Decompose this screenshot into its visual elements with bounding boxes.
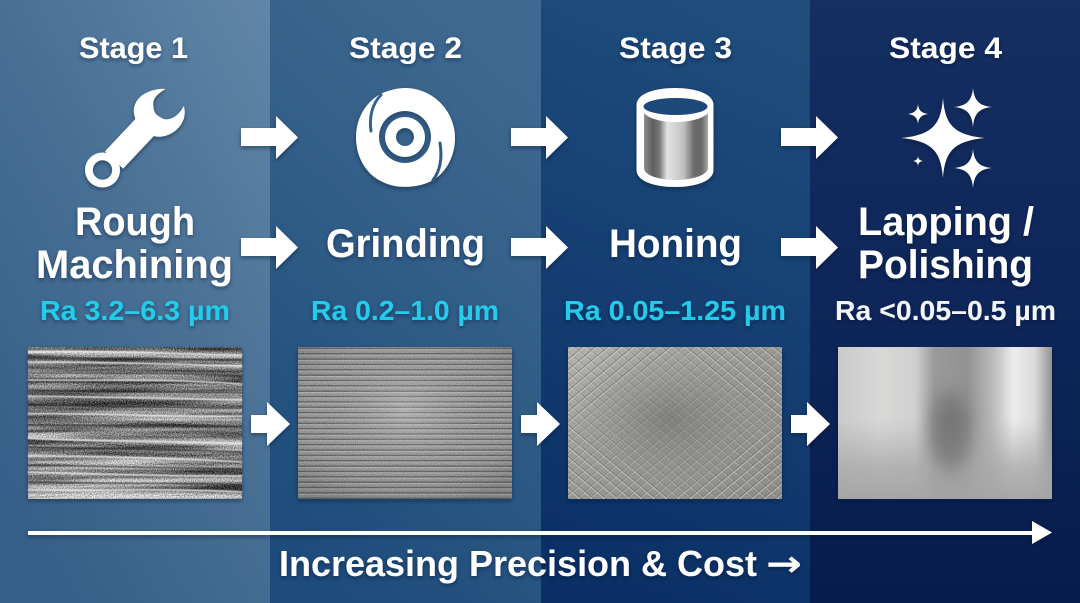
roughness value: Ra 0.05–1.25 µm: Ra 0.05–1.25 µm <box>564 295 786 326</box>
arrows: top row <box>241 116 838 159</box>
stage 3 column <box>564 32 786 499</box>
roughness value: Ra 3.2–6.3 µm: Ra 3.2–6.3 µm <box>40 295 230 326</box>
caption: Increasing Precision & Cost: Increasing Precision & Cost <box>279 543 757 584</box>
stage 4 column <box>835 32 1056 499</box>
arrows: between surface samples <box>251 402 830 446</box>
icon: wrench <box>85 89 185 188</box>
arrows: middle row <box>241 226 838 269</box>
heading: Stage 3: Stage 3 <box>619 32 732 65</box>
stage 2 column <box>298 32 512 499</box>
heading: Stage 1: Stage 1 <box>79 32 188 65</box>
surface texture: ground <box>298 347 512 499</box>
surface texture: mirror polished <box>838 347 1052 499</box>
icon: sparkles <box>901 88 992 188</box>
stage 1 column <box>28 32 242 499</box>
heading: Stage 4: Stage 4 <box>889 32 1002 65</box>
panel: stage 3 background <box>541 0 810 603</box>
stage name: Rough Machining: Rough <box>75 200 195 244</box>
roughness value: Ra <0.05–0.5 µm: Ra <0.05–0.5 µm <box>835 295 1056 326</box>
heading: Stage 2: Stage 2 <box>349 32 462 65</box>
icon: grinding wheel <box>356 88 455 187</box>
surface texture: cross-hatched honed <box>568 347 782 499</box>
stage name: Lapping / Polishing <box>858 200 1034 287</box>
stage name: Lapping / Polishing: Polishing <box>858 243 1033 287</box>
stage name: Rough Machining: Machining <box>36 243 233 287</box>
arrow: long progress axis <box>28 521 1052 544</box>
stage name: Honing: Honing <box>609 222 742 266</box>
panel: stage 1 background <box>0 0 270 603</box>
surface texture: rough machined <box>28 347 242 499</box>
roughness value: Ra 0.2–1.0 µm: Ra 0.2–1.0 µm <box>311 295 499 326</box>
stage name: Rough Machining <box>36 200 233 287</box>
stage name: Grinding: Grinding <box>326 222 485 266</box>
panel: stage 4 background <box>810 0 1080 603</box>
stage name: Lapping / Polishing: Lapping / <box>858 200 1034 244</box>
panel: stage 2 background <box>270 0 541 603</box>
caption: Increasing Precision & Cost: → <box>766 544 802 585</box>
icon: honed cylinder <box>636 88 714 187</box>
